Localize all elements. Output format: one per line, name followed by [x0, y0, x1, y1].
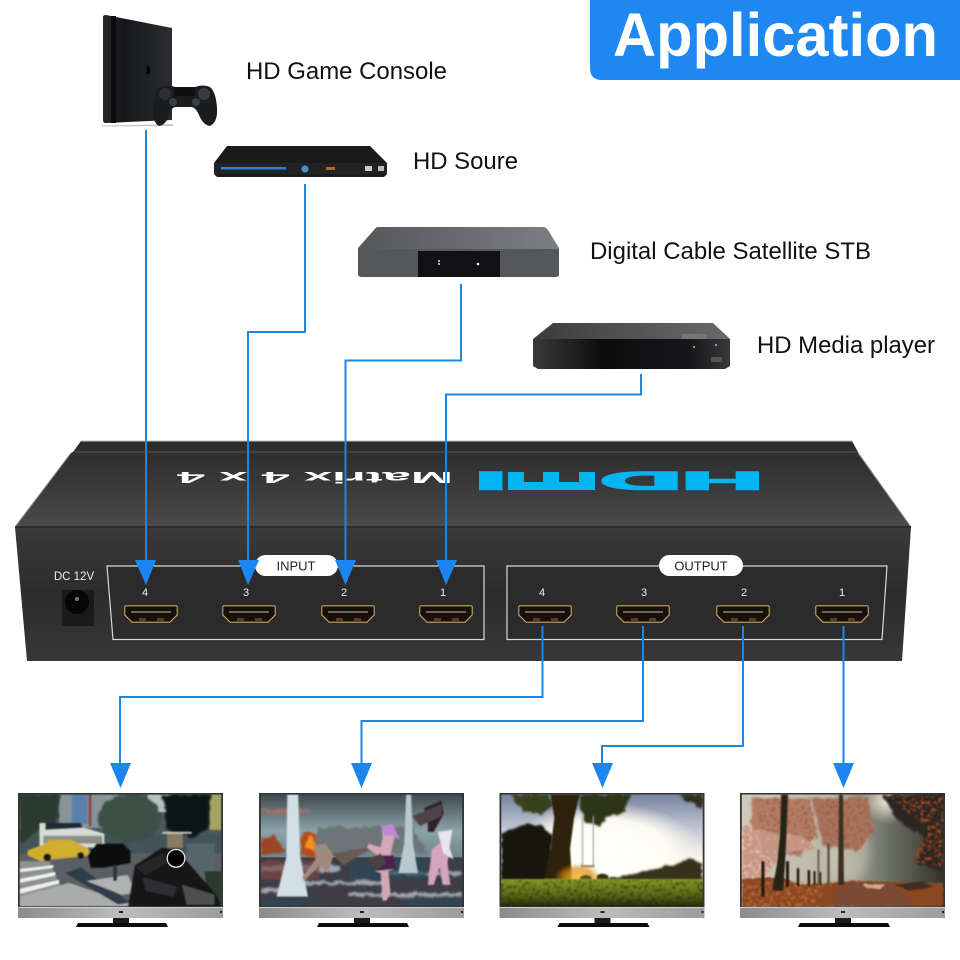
arrow: source to input 3	[238, 184, 305, 585]
panel: TV 4 autumn forest scene	[740, 777, 945, 927]
panel: TV 2 anime scene	[259, 793, 464, 927]
output port numbers: 1	[839, 587, 845, 599]
input pill	[255, 555, 338, 576]
output frame	[507, 566, 887, 640]
output port numbers: 2	[741, 587, 747, 599]
output pill: OUTPUT	[674, 558, 728, 574]
arrow: output 4 to TV 1	[110, 626, 542, 788]
output port numbers: 4	[539, 587, 545, 599]
icon: set top box	[358, 227, 559, 277]
input port numbers: 1	[440, 587, 446, 599]
icon: game console with controller	[101, 15, 217, 126]
output port numbers: 3	[641, 587, 647, 599]
arrow: set top box to input 2	[335, 284, 461, 585]
label: Digital Cable Satellite STB: Digital Cable Satellite STB	[590, 238, 871, 265]
panel: TV 3 tree and swing scene	[500, 793, 704, 927]
arrow: output 2 to TV 3	[592, 626, 743, 788]
icon: blu-ray media player	[533, 323, 730, 369]
HDMI logo: HDMI	[475, 466, 763, 494]
power label: DC 12V	[54, 571, 94, 583]
HDMI logo	[479, 471, 760, 490]
input frame	[107, 566, 484, 640]
arrow: media player to input 1	[436, 374, 641, 585]
output port numbers	[539, 587, 845, 599]
output pill	[659, 555, 743, 576]
arrow: console to input 4	[135, 130, 156, 585]
label: HD Soure: HD Soure	[413, 148, 518, 175]
arrow: output 1 to TV 4	[833, 626, 854, 788]
input port numbers: 2	[341, 587, 347, 599]
input port numbers: 4	[142, 587, 148, 599]
label: HD Game Console: HD Game Console	[246, 58, 447, 85]
input pill: INPUT	[276, 558, 316, 574]
icon: DVD player	[214, 146, 387, 177]
HDMI ports	[125, 606, 868, 622]
panel: TV 1 game scene	[18, 793, 223, 927]
switch top face	[15, 441, 911, 527]
title banner: Application	[613, 1, 938, 69]
switch front face	[15, 527, 911, 661]
panel: HDMI matrix switch	[15, 441, 911, 661]
input port numbers	[142, 587, 446, 599]
product name: Matrix 4 x 4	[177, 468, 453, 485]
input port numbers: 3	[243, 587, 249, 599]
arrow: output 3 to TV 2	[351, 626, 643, 788]
power jack	[62, 590, 94, 626]
label: HD Media player: HD Media player	[757, 332, 935, 359]
